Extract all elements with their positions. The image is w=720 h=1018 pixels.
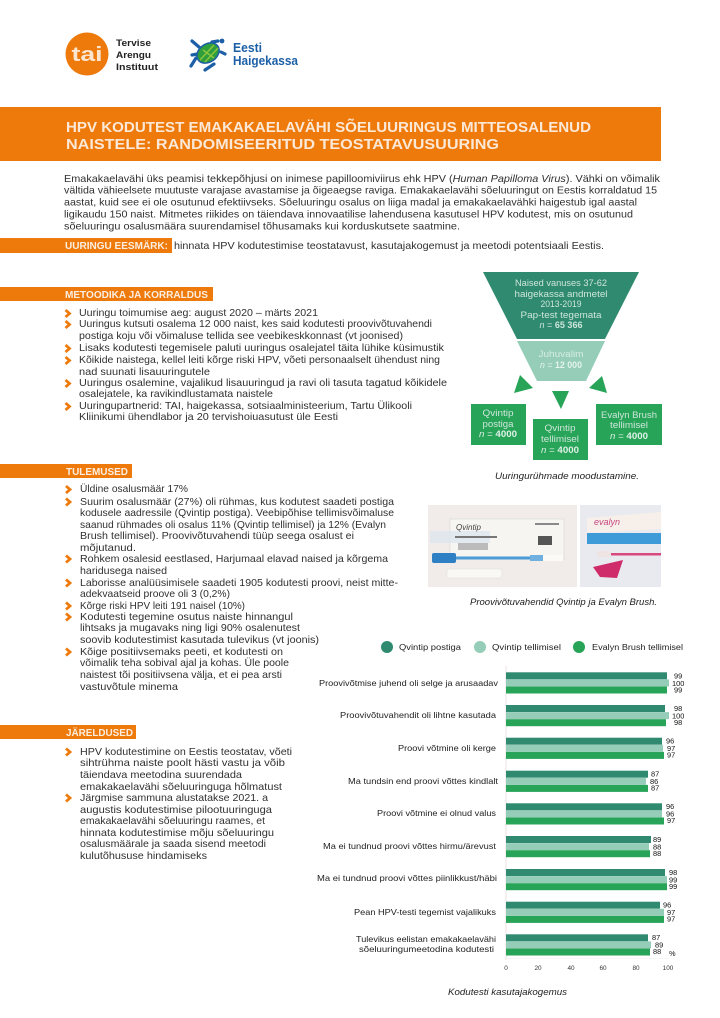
row: sampling easy: 97 <box>667 750 675 760</box>
row: confident <box>348 770 659 792</box>
text: results list: mõjutanud. <box>80 542 136 554</box>
logo: Tervise Arengu Instituut: tai <box>72 44 102 66</box>
heading: results <box>0 464 132 478</box>
text: results list: Üldine osalusmäär 17% <box>80 483 188 495</box>
text: results list: Suurim osalusmäär (27%) oli rühmas, kus kodutest saadeti postiga <box>80 496 394 508</box>
row: prefer in future: 87 <box>652 933 660 942</box>
row: no fear <box>323 835 661 858</box>
intro text: vältida vähieelsete muutuste varajase avastamise ja õigeaegse raviga. Emakakaelavähi sõeluuringut on Eestis korraldatud 15 <box>64 184 657 196</box>
row: necessary: Pean HPV-testi tegemist vajalikuks <box>354 907 496 917</box>
text: methodology list: Uuringus kutsuti osalema 12 000 naist, kes said kodutesti proovivõtuvahendi <box>79 318 432 330</box>
chart legend: Qvintip postiga <box>399 642 461 652</box>
text: conclusions list: emakakaelavähi sõeluuringu raames, et <box>80 815 265 827</box>
box: Qvintip postiga: n = 4000 <box>479 429 517 440</box>
row: not painful: 96 <box>666 810 674 818</box>
title banner <box>0 107 661 161</box>
row: instructions: 99 <box>674 686 682 694</box>
row: necessary: 96 <box>663 900 671 910</box>
caption: chart: Kodutesti kasutajakogemus <box>448 987 567 998</box>
study aim: hinnata HPV kodutestimise teostatavust, kasutajakogemust ja meetodi potentsiaali Eestis. <box>174 240 604 252</box>
row: not painful: 97 <box>667 816 675 825</box>
text: results list: Brush tellimisel). Proovivõtuvahendi tüüp seega osalust ei <box>80 530 354 542</box>
intro text: aastat, kuid see ei ole osutunud efektiivseks. Sõeluuringu osalus on liiga madal ja emakakaelavähki haigestub igal aastal <box>64 196 637 208</box>
photo: Evalyn Brush device <box>580 505 661 587</box>
text: results list: lihtsaks ja mugavaks ning ligi 90% osalenutest <box>80 622 300 634</box>
study aim: UURINGU EESMÄRK: <box>65 239 168 252</box>
heading: results: TULEMUSED <box>66 466 128 478</box>
text: conclusions list: hinnata kodutestimise mõju sõeluuringu <box>80 827 274 839</box>
row: device easy: 98 <box>674 704 682 713</box>
row: necessary <box>354 900 675 924</box>
row: prefer in future: % <box>669 949 676 958</box>
funnel middle: n = 12 000 <box>540 360 582 371</box>
x axis ticks: 0 <box>504 965 508 972</box>
text: conclusions list <box>80 746 292 862</box>
bullets: conclusions <box>66 748 70 802</box>
funnel top: Pap-test tegemata <box>520 310 602 321</box>
row: device easy <box>340 704 684 727</box>
x axis ticks: 20 <box>534 965 542 972</box>
heading: conclusions: JÄRELDUSED <box>66 726 133 739</box>
row: sampling easy: Proovi võtmine oli kerge <box>398 743 496 753</box>
text: results list: naistest tõi positiivsena välja, et ei pea arsti <box>80 669 282 681</box>
title banner: HPV KODUTEST EMAKAKAELAVÄHI SÕELUURINGUS MITTEOSALENUD <box>66 118 591 136</box>
logo: Tervise Arengu Instituut: Arengu <box>116 50 151 61</box>
x axis ticks: 60 <box>599 965 607 972</box>
funnel top: 2013-2019 <box>540 299 582 310</box>
row: no embarrassment: 99 <box>669 876 677 884</box>
row: device easy: 98 <box>674 718 682 727</box>
intro text: Emakakaelavähi üks peamisi tekkepõhjusi on inimese papilloomiviirus ehk HPV ( Human Papilloma Virus ). Vähki on võimalik <box>64 173 661 185</box>
text: conclusions list: emakakaelavähi sõeluuringuga hõlmatust <box>80 781 282 793</box>
text: results list: Kodutesti tegemine osutus naiste hinnangul <box>80 611 293 623</box>
row: instructions <box>319 672 684 694</box>
row: sampling easy: 96 <box>666 736 674 746</box>
row: no embarrassment: 99 <box>669 882 677 891</box>
row: no fear: 89 <box>653 835 661 844</box>
box: Qvintip tellimisel: tellimisel <box>541 434 579 445</box>
text: methodology list: nad suunati lisauuringutele <box>79 366 210 378</box>
heading: conclusions <box>0 725 136 739</box>
bullets: methodology <box>66 310 70 410</box>
row: prefer in future: Tulevikus eelistan emakakaelavähi <box>356 934 496 944</box>
text: results list: haridusega naised <box>80 565 167 577</box>
box: Qvintip postiga: Qvintip <box>482 408 514 419</box>
text: results list: Rohkem osalesid eestlased, Harjumaal elavad naised ja kõrgema <box>80 553 388 565</box>
logo: Tervise Arengu Instituut: Tervise <box>116 38 151 49</box>
box: Qvintip postiga <box>471 404 526 445</box>
diagram: study group funnel <box>471 272 662 460</box>
row: necessary: 97 <box>667 914 675 924</box>
text: conclusions list: HPV kodutestimine on Eestis teostatav, võeti <box>80 746 292 758</box>
row: prefer in future: 89 <box>655 940 663 950</box>
row: prefer in future: sõeluuringumeetodina kodutesti <box>359 944 494 954</box>
funnel middle <box>517 341 605 381</box>
intro text: ligikaudu 150 naist. Mitmetes riikides on täiendava innovaatilise lahendusena kasutusel HPV kodutest, mis on osutunud <box>64 208 633 220</box>
x axis ticks <box>504 965 674 972</box>
text: methodology list: osalejatele, ka ravikindlustamata naistele <box>79 388 273 400</box>
text: methodology list: Uuringu toimumise aeg: august 2020 – märts 2021 <box>79 307 318 319</box>
intro text: sõeluuringu osalusmäära suurendamisel tõhusamaks kui korduskutsete saatmine. <box>64 220 460 232</box>
panel: conclusions <box>0 725 292 862</box>
chart legend: Evalyn Brush tellimisel <box>592 642 683 652</box>
photo: Evalyn Brush device: evalyn <box>594 517 620 527</box>
text: results list: soovib kodutestimist kasutada tulevikus (vt joonis) <box>80 634 319 646</box>
row: no embarrassment <box>317 868 677 891</box>
row: confident: 86 <box>650 777 658 786</box>
logo: Tervise Arengu Instituut <box>66 32 159 76</box>
row: not painful: 96 <box>666 802 674 811</box>
row: prefer in future <box>356 933 676 958</box>
row: device easy: 100 <box>672 712 684 720</box>
logo: Eesti Haigekassa: Haigekassa <box>233 53 299 68</box>
funnel middle: Juhuvalim <box>538 349 584 360</box>
funnel top: n = 65 366 <box>540 320 582 331</box>
logo: Eesti Haigekassa <box>191 39 299 70</box>
text: results list: vastuvõtule minema <box>80 681 178 693</box>
row: device easy: Proovivõtuvahendit oli lihtne kasutada <box>340 710 496 720</box>
row: no embarrassment: 98 <box>669 868 677 877</box>
row: no embarrassment: Ma ei tundnud proovi võttes piinlikkust/häbi <box>317 873 497 883</box>
box: Evalyn Brush tellimisel: n = 4000 <box>610 431 648 442</box>
text: results list: Kõige positiivsemaks peeti, et kodutesti on <box>80 646 283 658</box>
chart legend: Qvintip tellimisel <box>492 642 561 652</box>
text: results list: adekvaatseid proove oli 3 (0,2%) <box>80 588 230 600</box>
text: methodology list: Uuringus osalemine, vajalikud lisauuringud ja ravi oli tasuta tagatud kõikidele <box>79 377 447 389</box>
text: methodology list: Kõikide naistega, kellel leiti kõrge riski HPV, võeti personaalselt ühendust ning <box>79 354 440 366</box>
text: methodology list <box>79 307 447 423</box>
arrows <box>514 375 607 409</box>
text: methodology list: Uuringupartnerid: TAI, haigekassa, sotsiaalministeerium, Tartu Ülikooli <box>79 400 412 412</box>
text: results list: Kõrge riski HPV leiti 191 naisel (10%) <box>80 600 245 612</box>
logo: Tervise Arengu Instituut: Instituut <box>116 62 159 73</box>
chart legend <box>381 641 683 653</box>
box: Qvintip tellimisel <box>533 419 588 460</box>
row: instructions: Proovivõtmise juhend oli selge ja arusaadav <box>319 678 499 688</box>
text: methodology list: Kliinikumi ühendlabor ja 20 tervishoiuasutust üle Eesti <box>79 411 338 423</box>
intro text <box>64 173 661 232</box>
row: confident: Ma tundsin end proovi võttes kindlalt <box>348 776 499 786</box>
row: instructions: 99 <box>674 672 682 680</box>
study aim <box>0 238 604 253</box>
panel: methodology <box>0 287 447 423</box>
funnel top <box>483 272 639 339</box>
x axis ticks: 40 <box>567 965 575 972</box>
box: Evalyn Brush tellimisel <box>596 404 662 445</box>
text: results list: saanud rühmades oli osalus 11% (Qvintip tellimisel) ja 12% (Evalyn <box>80 519 386 531</box>
bullets: results <box>66 486 70 656</box>
row: sampling easy <box>398 736 675 760</box>
panel: results <box>0 464 399 693</box>
box: Qvintip tellimisel: n = 4000 <box>541 445 579 456</box>
row: no fear: 88 <box>653 842 661 852</box>
row: confident: 87 <box>651 784 659 792</box>
row: instructions: 100 <box>672 679 684 688</box>
x axis ticks: 80 <box>632 965 640 972</box>
funnel top: haigekassa andmetel <box>514 289 608 300</box>
photo: Qvintip device: Qvintip <box>456 523 481 532</box>
logo: Eesti Haigekassa: Eesti <box>233 40 262 55</box>
caption: devices: Proovivõtuvahendid Qvintip ja Evalyn Brush. <box>470 597 657 608</box>
row: prefer in future: 88 <box>653 947 661 956</box>
text: results list: kodusele aadressile (Qvintip postiga). Veebipõhise tellimisvõimaluse <box>80 507 394 519</box>
box: Evalyn Brush tellimisel: tellimisel <box>610 420 648 431</box>
row: sampling easy: 97 <box>667 744 675 753</box>
text: conclusions list: Järgmise sammuna alustatakse 2021. a <box>80 792 268 804</box>
row: necessary: 97 <box>667 908 675 917</box>
heading: methodology <box>0 287 213 301</box>
row: no fear: 88 <box>653 849 661 858</box>
row: not painful <box>377 802 675 825</box>
x axis ticks: 100 <box>663 965 674 972</box>
box: Qvintip postiga: postiga <box>482 419 514 430</box>
box: Qvintip tellimisel: Qvintip <box>544 423 576 434</box>
caption: funnel: Uuringurühmade moodustamine. <box>495 471 639 482</box>
title banner: NAISTELE: RANDOMISEERITUD TEOSTATAVUSUURING <box>66 137 499 153</box>
row: not painful: Proovi võtmine ei olnud valus <box>377 808 496 818</box>
funnel top: Naised vanuses 37-62 <box>515 278 607 289</box>
row: confident: 87 <box>651 770 659 778</box>
text: conclusions list: täiendava meetodina suurendada <box>80 769 242 781</box>
bar chart: user experience <box>317 666 684 972</box>
text: conclusions list: augustis kodutestimise pilootuuringuga <box>80 804 272 816</box>
box: Evalyn Brush tellimisel: Evalyn Brush <box>601 410 657 421</box>
text: conclusions list: sihtrühma naiste poolt hästi vastu ja võib <box>80 757 285 769</box>
heading: methodology: METOODIKA JA KORRALDUS <box>65 289 208 301</box>
text: results list: võimalik teha sobival ajal ja kohas. Üle poole <box>80 657 289 669</box>
text: methodology list: Lisaks kodutesti tegemisele paluti uuringus osalejatel täita lühike küsimustik <box>79 342 445 354</box>
text: methodology list: postiga koju või võimaluse tellida see veebikeskkonnast (vt joonised) <box>79 330 403 342</box>
text: results list: Laborisse analüüsimisele saadeti 1905 kodutesti proovi, neist mitte- <box>80 577 399 589</box>
text: conclusions list: kulutõhususe hindamiseks <box>80 850 207 862</box>
text: conclusions list: osalusmäärale ja saada sisend meetodi <box>80 838 266 850</box>
row: no fear: Ma ei tundnud proovi võttes hirmu/ärevust <box>323 841 497 851</box>
text: results list <box>80 483 399 693</box>
photo: Qvintip device <box>428 505 577 587</box>
